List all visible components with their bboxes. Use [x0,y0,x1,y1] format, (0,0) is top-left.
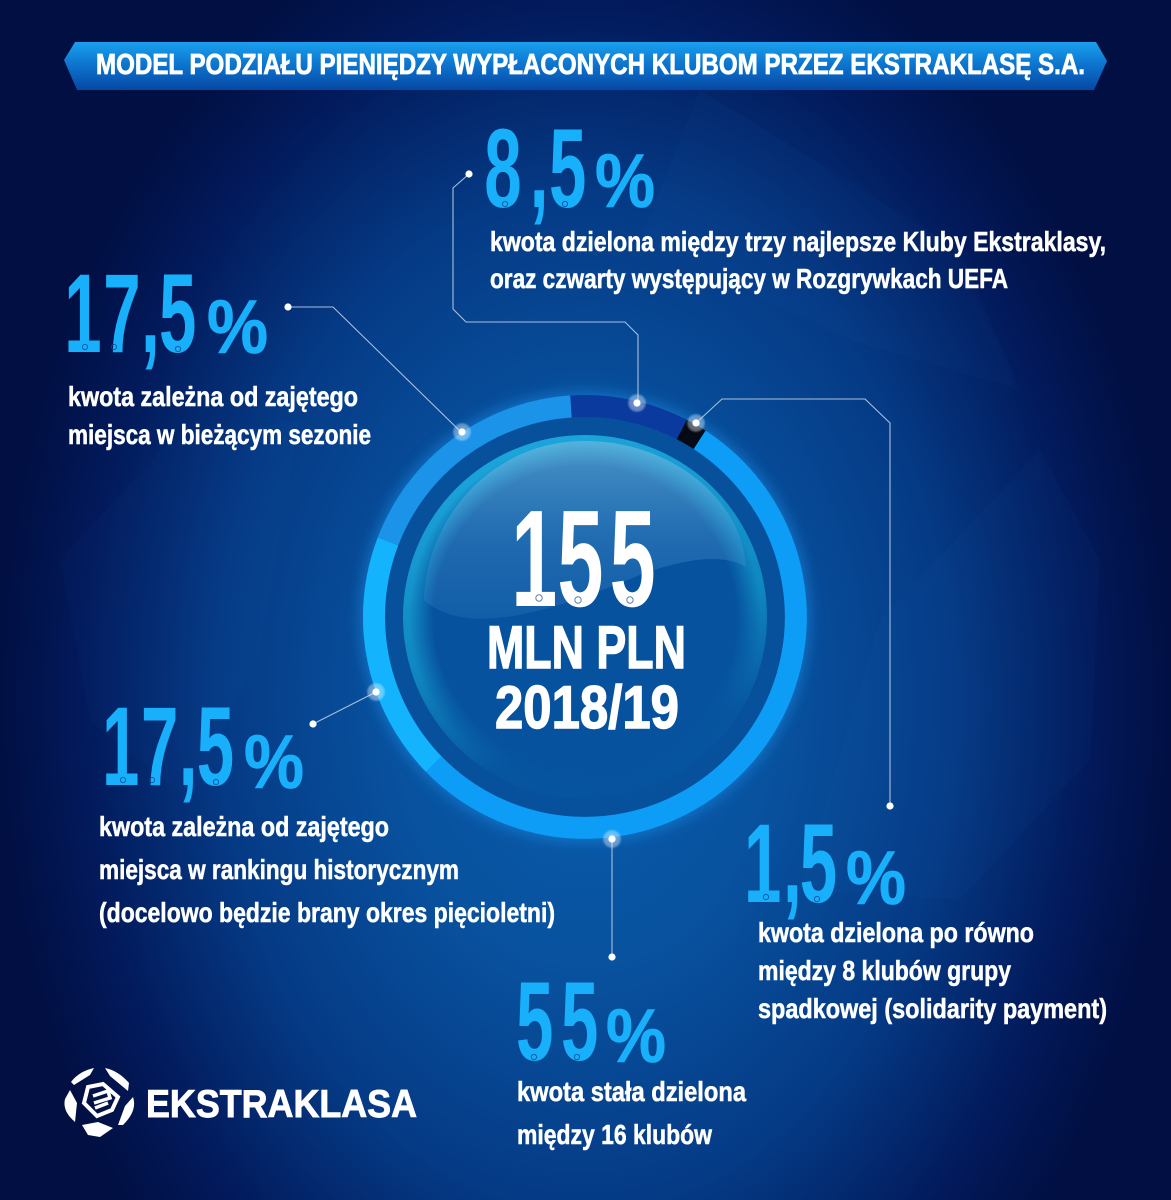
callout 55%: % [606,994,666,1079]
callout 17.5% ranking: kwota zależna od zajętego [99,811,389,842]
centre label: 2018/19 [495,674,679,741]
callout 1.5%: 1,5 [744,800,837,926]
connector lines [288,174,890,957]
logo: Ekstraklasa [64,1068,417,1137]
callout 8.5% [484,105,1106,294]
callout 55%: kwota stała dzielona [517,1076,746,1107]
callout 17.5% ranking: 17,5 [102,683,234,809]
callout 1.5%: między 8 klubów grupy [758,955,1011,986]
callout 17.5% ranking: % [244,720,304,805]
callout 55%: 55 [516,958,598,1084]
disc gloss [424,441,746,619]
callout 1.5%: % [846,836,906,921]
callout 8.5%: % [595,139,655,224]
callout 55% [516,958,746,1150]
segment 17.5% ranking [374,541,434,764]
callout 1.5% [744,800,1107,1024]
segment 55% [434,440,796,828]
connector dots [284,170,894,961]
icon: football [64,1068,134,1137]
callout 1.5%: spadkowej (solidarity payment) [758,993,1107,1024]
segment 8.5% [571,406,682,430]
callout 17.5% ranking: (docelowo będzie brany okres pięcioletni) [99,897,555,928]
wordmark: EKSTRAKLASA [146,1083,417,1126]
callout 17.5% season: 17,5 [64,250,196,376]
centre disc [403,435,767,799]
segment 1.5% [682,430,700,440]
callout 1.5%: kwota dzielona po równo [758,917,1034,948]
callout 8.5%: oraz czwarty występujący w Rozgrywkach UEFA [490,263,1008,294]
callout 17.5% season: miejsca w bieżącym sezonie [68,419,371,450]
callout 17.5% ranking [99,683,555,928]
centre label [487,482,686,741]
callout 17.5% ranking: miejsca w rankingu historycznym [99,854,459,885]
title banner [64,42,1107,90]
centre label: MLN PLN [487,614,686,681]
callout 17.5% season: kwota zależna od zajętego [68,381,358,412]
callout 8.5%: 8,5 [484,105,586,231]
ring chart [372,404,798,830]
segment 17.5% season [388,406,571,541]
callout 55%: między 16 klubów [517,1119,712,1150]
callout 17.5% season [64,250,371,450]
callout 17.5% season: % [207,285,268,370]
centre label: 155 [511,482,656,636]
